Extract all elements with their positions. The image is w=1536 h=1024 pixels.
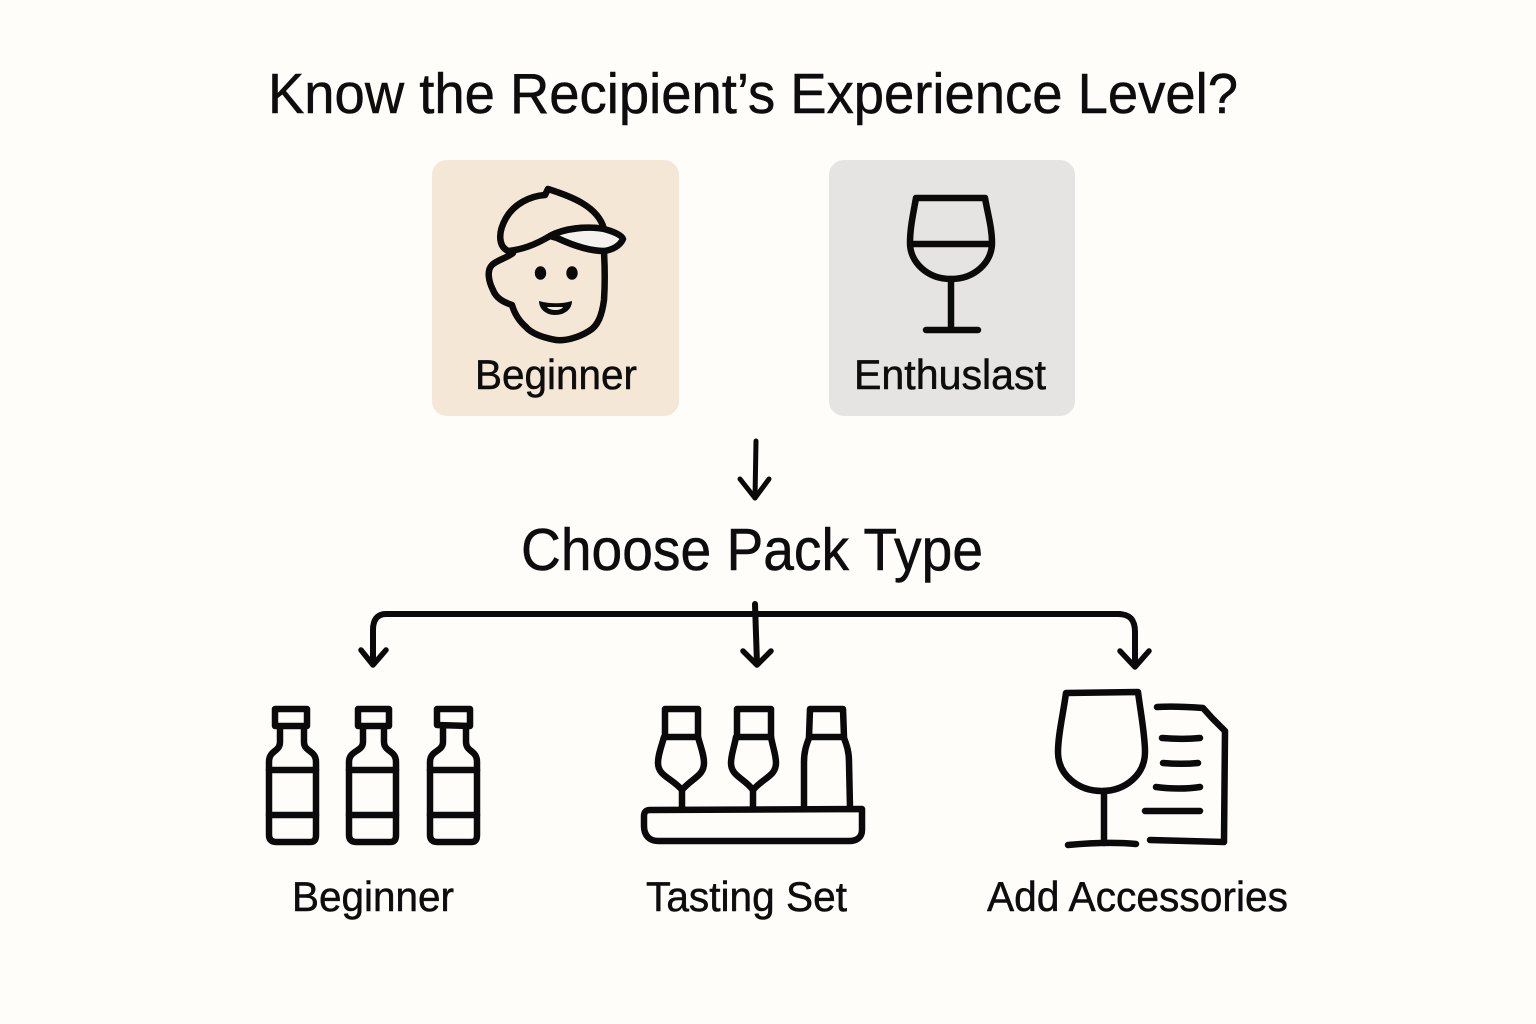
accessory document [1150, 707, 1225, 842]
tasting bottle [809, 709, 844, 737]
tasting glass 1 [665, 709, 698, 737]
icon: tasting set [644, 709, 862, 841]
bottle 3 [437, 709, 470, 726]
icon: wine glass [910, 198, 992, 330]
arrow: to tasting set [755, 604, 757, 664]
panel: beginner [432, 160, 679, 416]
icon: eyes [538, 270, 543, 276]
arrow: to choose pack type [740, 441, 769, 498]
arrow: to beginner pack [373, 614, 1120, 664]
label: beginner panel: Beginner [475, 351, 637, 398]
icon: smile [539, 301, 572, 315]
icon: beginner face with cap [489, 189, 623, 340]
label: enthusiast panel: Enthuslast [854, 351, 1046, 398]
panel background: enthusiast [829, 160, 1075, 416]
bottle 2 [358, 709, 389, 726]
panel: enthusiast [829, 160, 1075, 416]
icon: three bottles [269, 709, 477, 842]
label: beginner pack: Beginner [292, 873, 454, 920]
accessory glass [1058, 692, 1145, 791]
title: Know the Recipient’s Experience Level? [268, 62, 1238, 126]
arrow: branching connector [361, 604, 1149, 667]
icon: glass and accessories list [1058, 692, 1225, 845]
label: tasting set: Tasting Set [646, 873, 847, 920]
label: add accessories: Add Accessories [987, 873, 1288, 920]
bottle 1 [275, 709, 307, 726]
tasting glass 2 [737, 709, 771, 737]
arrow: to accessories [1118, 614, 1135, 666]
tasting tray [644, 809, 862, 841]
heading: choose pack type: Choose Pack Type [521, 517, 983, 583]
smile teeth [547, 307, 563, 310]
panel background: beginner [432, 160, 679, 416]
